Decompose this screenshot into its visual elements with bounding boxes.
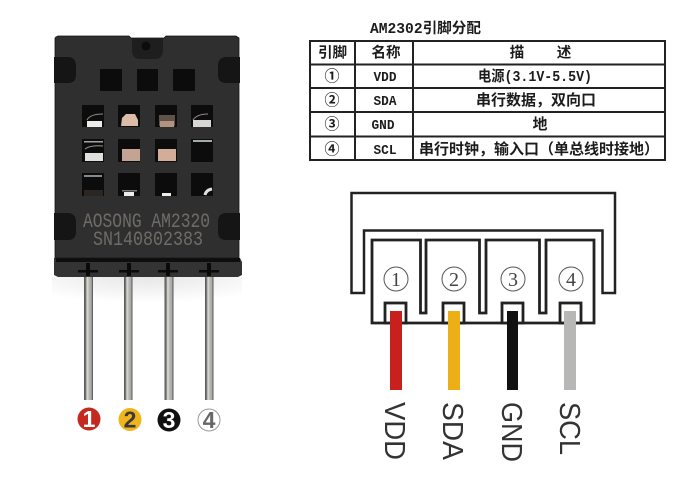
pin number 4: [559, 267, 583, 291]
pin slots: [385, 303, 581, 323]
engraved marking: SN140802383: [93, 229, 203, 252]
wire: grey SCL: [564, 311, 576, 390]
top mounting hole: [142, 42, 150, 50]
connector outer shell: [352, 193, 615, 293]
connector wiring diagram: [352, 193, 615, 462]
pin number 1: 1: [391, 269, 401, 291]
badge 4 outline: [198, 407, 220, 433]
sensor photo: AM2320 module: [54, 36, 242, 400]
pin number 1: [384, 267, 408, 291]
header row: [318, 44, 572, 62]
header row: 述: [557, 44, 572, 62]
pin shoulders: [78, 263, 219, 276]
row 2: ②: [324, 92, 340, 110]
vent windows bottom row: [82, 173, 213, 196]
wire label VDD: VDD: [378, 402, 410, 460]
pin number 3: [501, 267, 525, 291]
header row: 描: [510, 44, 524, 62]
table title: AM2302引脚分配: [370, 20, 481, 38]
table grid: [310, 41, 665, 160]
badge 2 yellow: 2: [124, 406, 136, 432]
pin number 4: 4: [566, 269, 576, 291]
wire: black GND: [507, 311, 518, 390]
row 3: ③: [324, 116, 340, 134]
header row: 引脚: [318, 44, 347, 62]
pin number 3: 3: [508, 269, 518, 291]
row 1: VDD: [374, 70, 396, 86]
engraved marking: AOSONG AM2320: [83, 211, 210, 234]
row 2: SDA: [374, 94, 397, 110]
connector inner housing with dividers: [372, 240, 594, 323]
badge 1 red: [78, 406, 100, 432]
engraved marking: [83, 211, 210, 252]
row 1: 电源(3.1V-5.5V): [478, 68, 592, 86]
vent windows top row: [100, 69, 195, 91]
badge 4 outline: 4: [203, 407, 216, 433]
row 2: 串行数据，双向口: [476, 91, 596, 110]
pin number 2: 2: [449, 269, 459, 291]
header row: 名称: [372, 44, 401, 62]
metal pins: [84, 275, 214, 400]
soft shadow below sensor: [52, 277, 242, 311]
row 4: SCL: [374, 143, 396, 159]
sensor internals seen through vents: [84, 114, 212, 196]
pin assignment table: [310, 41, 665, 160]
badge 3 black: 3: [163, 407, 175, 433]
wire: red VDD: [390, 311, 402, 390]
sensor housing body: [55, 36, 239, 258]
badge 3 black: [158, 407, 180, 433]
corner clips: [54, 57, 240, 240]
row 4: [324, 140, 659, 159]
row 4: 串行时钟，输入口（单总线时接地）: [419, 140, 659, 159]
row 2: [324, 91, 596, 110]
row 4: ④: [324, 141, 340, 159]
top center recess: [132, 38, 163, 59]
badge 2 yellow: [118, 406, 142, 432]
badge 1 red: 1: [83, 406, 96, 432]
row 1: ①: [324, 68, 340, 86]
lip shadow line: [56, 258, 240, 262]
vent windows middle rows: [82, 105, 213, 162]
row 3: [324, 116, 548, 134]
lower housing lip: [54, 258, 242, 277]
row 1: [324, 68, 592, 86]
wire: yellow SDA: [448, 311, 460, 390]
pin number 2: [442, 267, 466, 291]
wire label SCL: SCL: [553, 402, 585, 455]
pin number badges: [78, 406, 220, 433]
wire label SDA: SDA: [436, 402, 468, 461]
row 3: 地: [532, 116, 548, 134]
wire label GND: GND: [495, 402, 527, 462]
row 3: GND: [372, 118, 394, 134]
